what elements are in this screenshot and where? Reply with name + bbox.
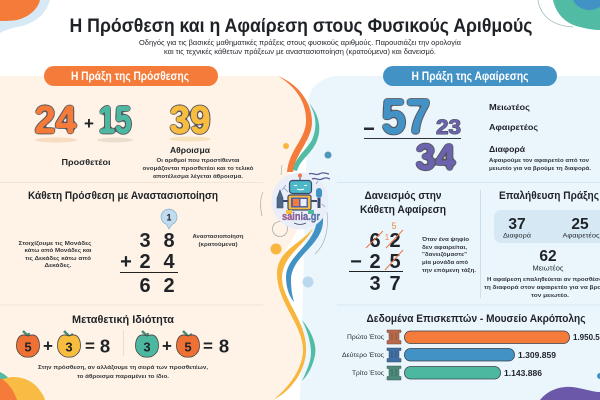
subtraction example: 57 - 23 = 34: 23: [436, 116, 461, 139]
logo: sainia.gr robot: sainia.gr: [282, 211, 321, 223]
text: alignment explanation: [18, 241, 92, 269]
vertical addition calculation: 3: [139, 230, 151, 252]
text: commutative explanation: [38, 365, 208, 380]
verification result and note: [484, 248, 600, 299]
text: borrowing explanation: μία μονάδα από: [422, 260, 468, 266]
text: borrowing explanation: δεν αφαιρείται,: [422, 245, 467, 251]
decoration: bottom-right blob: [540, 373, 600, 400]
labels: subtraction terms: Διαφορά: [489, 144, 526, 154]
bar row: third year: 1.143.886: [504, 369, 543, 378]
addition example: 24 + 15: [34, 99, 133, 142]
bar row: first year: [347, 330, 600, 344]
bar row: second year: 1.309.859: [518, 351, 557, 360]
label: sum with explanation: [142, 145, 254, 180]
bar chart: museum visitors: [342, 330, 600, 380]
vertical subtraction calculation: 5: [389, 251, 401, 273]
heading pill: subtraction: Η Πράξη της Αφαίρεσης: [412, 71, 529, 83]
vertical subtraction calculation: 2: [369, 251, 381, 273]
heading: commutative property: Μεταθετική Ιδιότητα: [72, 314, 174, 326]
text: borrowing explanation: την επόμενη τάξη.: [422, 268, 476, 274]
panel: addition background: [0, 76, 310, 400]
text: alignment explanation: Στοιχίζουμε τις Μονάδες: [18, 241, 92, 247]
heading: borrowing: Δανεισμός στην: [364, 190, 442, 202]
label: carry: (κρατούμενα): [198, 242, 238, 248]
text: alignment explanation: Δεκάδες.: [44, 263, 72, 269]
text: borrowing explanation: [421, 237, 476, 274]
equation: 5 + 3 = 8: +: [43, 336, 53, 356]
verification result and note: 62: [539, 248, 557, 265]
vertical subtraction calculation: 6: [369, 230, 381, 252]
verification box: Αφαιρετέος: [562, 232, 600, 240]
subtraction example: 57 - 23 = 34: 34: [416, 136, 456, 178]
text: borrowing explanation: Όταν ένα ψηφίο: [421, 237, 469, 243]
text: borrowing explanation: "δανειζόμαστε": [422, 252, 467, 258]
equation: 5 + 3 = 8: 3: [65, 340, 73, 354]
verification box: 37: [508, 216, 526, 233]
label: carry: Αναστασιοποίηση: [192, 234, 244, 240]
subtraction example: 57 - 23 = 34: 57: [382, 90, 430, 144]
bar row: third year: Τρίτο Έτος: [352, 369, 384, 377]
heading: visitors chart: Δεδομένα Επισκεπτών - Μουσείο Ακρόπολης: [366, 313, 586, 325]
verification box: Διαφορά: [503, 232, 531, 240]
decoration: floating dots: [270, 143, 332, 288]
label: sum with explanation: Οι αριθμοί που προστίθενται: [156, 158, 240, 164]
heading: vertical addition: Κάθετη Πρόσθεση με Αναστασιοποίηση: [28, 190, 218, 202]
labels: subtraction terms: [489, 102, 591, 172]
equation: 5 + 3 = 8: [16, 331, 110, 357]
verification result and note: τη διαφορά στον αφαιρετέο για να βρούμε: [484, 285, 600, 291]
decoration: top-right blob: [538, 0, 600, 30]
logo: sainia.gr robot: [272, 172, 330, 230]
title: Η Πρόσθεση και η Αφαίρεση στους Φυσικούς Αριθμούς: [70, 16, 533, 37]
vertical subtraction calculation: −: [350, 251, 362, 273]
labels: subtraction terms: Αφαιρετέος: [489, 122, 539, 132]
subtraction example: 57 - 23 = 34: [364, 90, 461, 178]
subtitle: και τις τεχνικές κάθετων πράξεων με αναστασιοποίηση (κρατούμενα) και δανεισμό.: [164, 48, 436, 56]
equation: 5 + 3 = 8: =: [85, 336, 95, 356]
vertical subtraction calculation: 5: [391, 221, 397, 231]
equation: 3 + 5 = 8: 5: [184, 340, 192, 354]
heading: borrowing: Κάθετη Αφαίρεση: [360, 204, 446, 216]
carry badge: [161, 209, 177, 229]
text: commutative explanation: το άθροισμα παραμένει το ίδιο.: [77, 374, 169, 380]
heading pill: addition: [44, 66, 218, 86]
vertical addition calculation: [120, 230, 178, 297]
vertical addition calculation: 6: [139, 275, 151, 297]
equation: 3 + 5 = 8: 8: [219, 336, 229, 356]
vertical addition calculation: 8: [163, 230, 175, 252]
bar row: second year: [342, 348, 557, 362]
verification box: [494, 210, 600, 243]
vertical subtraction calculation: 7: [389, 273, 401, 295]
labels: subtraction terms: Μειωτέος: [489, 102, 531, 112]
bar row: first year: 1.950.5: [573, 333, 600, 342]
heading pill: addition: Η Πράξη της Πρόσθεσης: [71, 71, 189, 83]
addition result: 39: 39: [170, 99, 210, 142]
decoration: bottom-left blob: [0, 372, 45, 400]
vertical subtraction calculation: 1: [385, 233, 390, 242]
label: sum with explanation: αποτέλεσμα λέγεται άθροισμα.: [153, 174, 243, 180]
decoration: central wave ribbons: [261, 76, 328, 400]
bar row: second year: Δεύτερο Έτος: [342, 351, 384, 359]
text: commutative explanation: Στην πρόσθεση, αν αλλάξουμε τη σειρά των προσθετέων,: [38, 365, 208, 371]
equation: 5 + 3 = 8: 5: [24, 340, 32, 354]
verification result and note: τον μειωτέο.: [531, 293, 569, 299]
text: alignment explanation: κάτω από Μονάδες και: [24, 248, 92, 254]
bar row: third year: [352, 366, 543, 380]
label: sum with explanation: Αθροισμα: [170, 145, 211, 155]
vertical subtraction calculation: 2: [389, 230, 401, 252]
equation: 3 + 5 = 8: 3: [143, 340, 151, 354]
bar row: first year: Πρώτο Έτος: [347, 333, 384, 341]
label: sum with explanation: ονομάζονται προσθετέοι και το τελικό: [142, 166, 254, 172]
panel: subtraction background: [300, 76, 600, 400]
subtitle: [139, 39, 461, 56]
text: alignment explanation: τις Δεκάδες κάτω από: [25, 256, 91, 262]
vertical addition calculation: 2: [139, 251, 151, 273]
labels: subtraction terms: Αφαιρούμε τον αφαιρετέο από τον: [489, 158, 590, 164]
addition example: 24 + 15: 15: [98, 99, 132, 142]
carry badge: 1: [166, 212, 172, 222]
equation: 3 + 5 = 8: +: [162, 336, 172, 356]
verification box: 25: [571, 216, 589, 233]
vertical addition calculation: 4: [163, 251, 175, 273]
equation: 3 + 5 = 8: =: [203, 336, 213, 356]
subtitle: Οδηγός για τις βασικές μαθηματικές πράξεις στους φυσικούς αριθμούς. Παρουσιάζει την ορολογία: [139, 39, 461, 47]
verification result and note: Μειωτέος: [532, 264, 564, 272]
equation: 5 + 3 = 8: 8: [100, 336, 110, 356]
heading pill: subtraction: [383, 66, 557, 86]
decoration: top-left blob: [0, 0, 50, 33]
labels: subtraction terms: μειωτέο για να βρούμε τη διαφορά.: [489, 166, 591, 172]
equation: 3 + 5 = 8: [136, 331, 229, 357]
addition example: 24 + 15: 24: [34, 99, 77, 142]
vertical subtraction calculation: [349, 221, 403, 295]
label: addends: Προσθετέοι: [62, 157, 111, 167]
vertical addition calculation: 2: [163, 275, 175, 297]
addition example: 24 + 15: +: [84, 114, 94, 133]
heading: borrowing: [360, 190, 446, 216]
vertical addition calculation: +: [120, 251, 132, 273]
vertical subtraction calculation: 3: [369, 273, 381, 295]
label: carry: [192, 234, 244, 248]
